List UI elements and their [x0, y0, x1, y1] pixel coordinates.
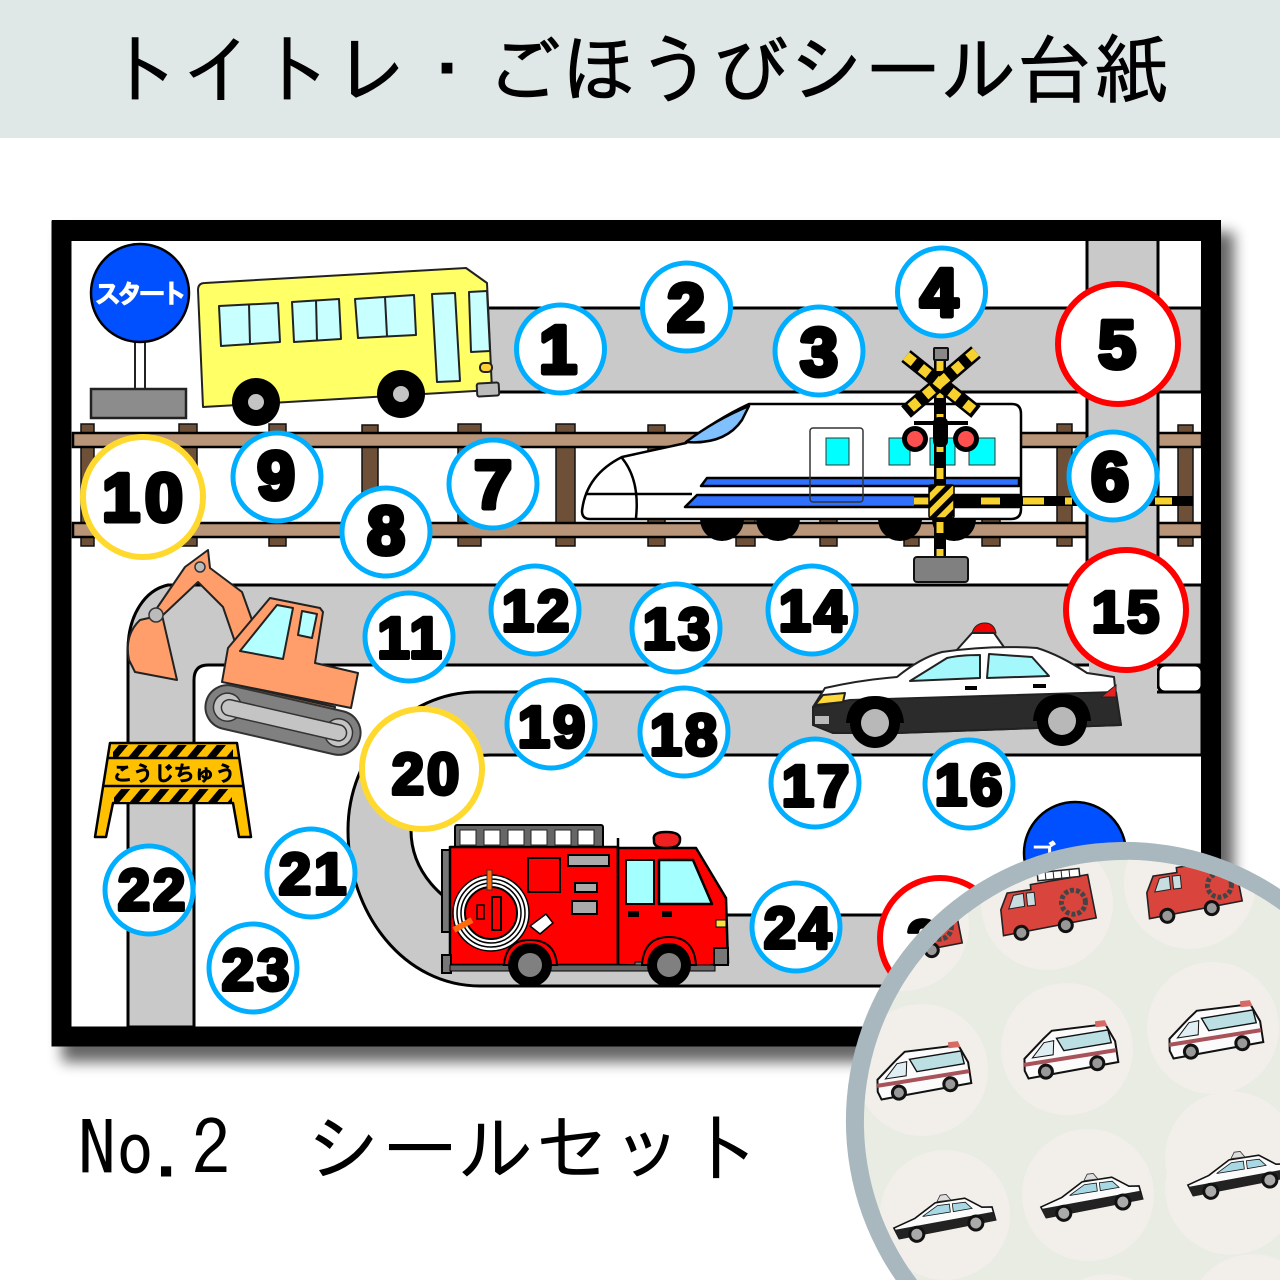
- stamp 2: [642, 263, 730, 351]
- frame border: [62, 230, 1211, 1036]
- stamp 24: 24: [764, 896, 834, 961]
- stamp 15: [1066, 550, 1186, 670]
- stamp 20: 20: [392, 742, 462, 807]
- stamp 19: 19: [518, 695, 588, 760]
- sticker: ambulance 3: [1165, 999, 1264, 1060]
- railway track: [73, 424, 1202, 546]
- stamp 10: [83, 437, 203, 557]
- title band: [0, 0, 1280, 138]
- stamp 7: 7: [474, 447, 512, 523]
- stamp 10: 10: [102, 460, 188, 536]
- fire truck: [442, 825, 728, 987]
- sticker: fire truck partial: [924, 920, 964, 958]
- goal sign: ゴール: [1030, 839, 1122, 869]
- stamp 5: [1058, 284, 1178, 404]
- excavator: [128, 550, 365, 759]
- subtitle: No.2 シールセット: [78, 1110, 762, 1186]
- stamp 13: [632, 584, 720, 672]
- sticker: ambulance 1: [873, 1040, 972, 1101]
- sticker: ambulance 2: [1020, 1019, 1119, 1080]
- stamp 7: [449, 440, 537, 528]
- stamp 21: [267, 829, 355, 917]
- stamp 13: 13: [643, 597, 713, 662]
- sticker: police car 3: [1186, 1151, 1280, 1200]
- goal sign: [1024, 802, 1126, 904]
- stamp 8: [342, 488, 430, 576]
- stamp 9: 9: [257, 438, 295, 514]
- yellow bus: [198, 268, 499, 426]
- bus stop sign: start: [91, 244, 189, 418]
- stamp 5: 5: [1098, 307, 1136, 383]
- stamp 23: [209, 924, 297, 1012]
- stamp 23: 23: [222, 938, 292, 1003]
- stamp 25: 25: [907, 909, 977, 974]
- sticker: fire truck 2: [1146, 866, 1244, 924]
- stamp 25: [880, 878, 1000, 998]
- notch between roads on the right: [1158, 665, 1202, 692]
- stamp 21: 21: [279, 842, 349, 907]
- road: upper horizontal: [480, 308, 1202, 392]
- stamp 19: [507, 680, 595, 768]
- stamp 17: [771, 739, 859, 827]
- stamp 6: 6: [1091, 439, 1129, 515]
- stamp 20: [362, 709, 482, 829]
- photo inset: sticker sheet: [837, 817, 1280, 1280]
- sticker: fire truck 1: [997, 867, 1098, 941]
- road: lower loop: [348, 692, 1202, 986]
- stamp 12: 12: [502, 579, 572, 644]
- stamp 9: [233, 433, 321, 521]
- stamp 6: [1069, 432, 1157, 520]
- stamp 14: 14: [779, 579, 849, 644]
- stamp 14: [768, 566, 856, 654]
- stamp 1: 1: [539, 312, 577, 388]
- title: トイトレ・ごほうびシール台紙: [105, 31, 1169, 107]
- construction barrier: [95, 743, 251, 837]
- stamp 2: 2: [667, 270, 705, 346]
- sticker: police car 1: [892, 1194, 997, 1243]
- sticker: police car 2: [1040, 1173, 1144, 1222]
- stamp 22: 22: [118, 858, 188, 923]
- stamp 18: [640, 688, 728, 776]
- stamp 11: [365, 593, 453, 681]
- stamp 1: [516, 305, 604, 393]
- stamp 16: [925, 740, 1013, 828]
- stamp 12: [491, 566, 579, 654]
- shinkansen train: [582, 404, 1021, 541]
- construction barrier: こうじちゅう: [112, 763, 236, 786]
- stamp 15: 15: [1092, 580, 1162, 645]
- road: vertical crossing: [1087, 241, 1158, 696]
- stamp 3: 3: [800, 314, 838, 390]
- stamp 18: 18: [650, 703, 720, 768]
- stamp 4: 4: [920, 255, 958, 331]
- railway crossing: [902, 348, 1193, 582]
- stamp 24: [752, 883, 840, 971]
- police car: [813, 623, 1121, 748]
- stamp 4: [898, 248, 986, 336]
- stamp 22: [105, 846, 193, 934]
- stamp 8: 8: [367, 493, 405, 569]
- stamp 11: 11: [377, 606, 445, 671]
- stamp 16: 16: [935, 753, 1005, 818]
- number stamps: [83, 248, 1186, 1012]
- bus stop sign: start: スタート: [95, 279, 187, 309]
- panel: sticker board: [52, 220, 1234, 1062]
- stamp 3: [775, 307, 863, 395]
- road: middle with left bend: [128, 585, 1202, 1027]
- stamp 17: 17: [782, 754, 852, 819]
